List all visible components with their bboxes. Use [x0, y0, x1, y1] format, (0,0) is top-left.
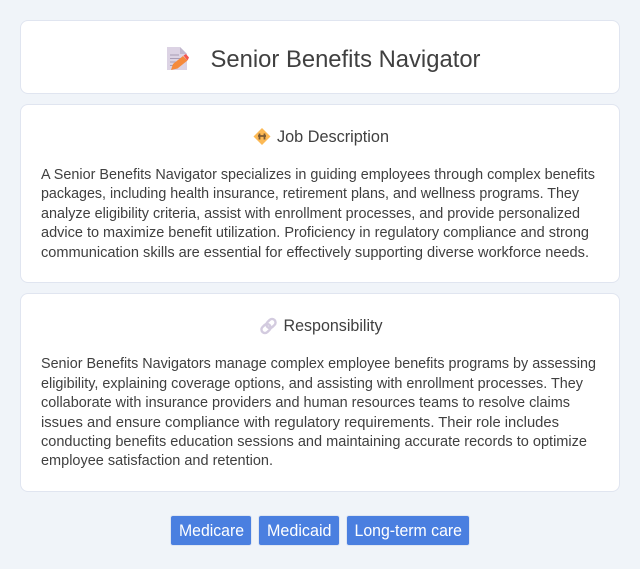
panel: job description card [20, 104, 620, 283]
heading: responsibility: Responsibility [284, 317, 383, 335]
text block: responsibility: eligibility, explaining coverage options, and assisting with enrollment processes. They [41, 376, 584, 392]
label: Medicare: Medicare [179, 522, 244, 540]
label: Long-term care: Long-term care [354, 522, 462, 540]
panel: responsibility card [20, 293, 620, 492]
text block: responsibility: conducting benefits education sessions and maintaining accurate records to optimize [41, 434, 587, 450]
icon: chain link [260, 317, 277, 335]
text block: responsibility: Senior Benefits Navigators manage complex employee benefits programs by assessing [41, 356, 596, 372]
title: Senior Benefits Navigator [210, 46, 480, 73]
badge: Medicaid background [259, 516, 339, 545]
text block: responsibility: collaborate with insurance providers and human resources teams to resolve claims [41, 395, 570, 411]
label: Medicaid: Medicaid [267, 522, 332, 540]
text block: job description [41, 167, 595, 261]
icon: diamond road sign [254, 128, 270, 145]
text block: responsibility [41, 356, 596, 469]
badge: Medicare background [171, 516, 251, 545]
text block: job description: advice to maximize benefit utilization. Proficiency in regulatory compliance and strong [41, 225, 589, 241]
text block: responsibility: issues and ensure compliance with regulatory requirements. Their role includes [41, 415, 559, 431]
text block: responsibility: employee satisfaction and retention. [41, 453, 273, 469]
heading: job description: Job Description [277, 128, 389, 146]
panel: title card [20, 20, 620, 94]
text block: job description: A Senior Benefits Navigator specializes in guiding employees through complex benefits [41, 167, 595, 183]
text block: job description: communication skills are essential for effectively supporting diverse workforce needs. [41, 245, 589, 261]
text block: job description: analyze eligibility criteria, assist with enrollment processes, and provide personalized [41, 206, 580, 222]
icon: document with pencil [167, 47, 189, 70]
text block: job description: packages, including health insurance, retirement plans, and wellness programs. They [41, 186, 580, 202]
badge: Long-term care background [347, 516, 469, 545]
